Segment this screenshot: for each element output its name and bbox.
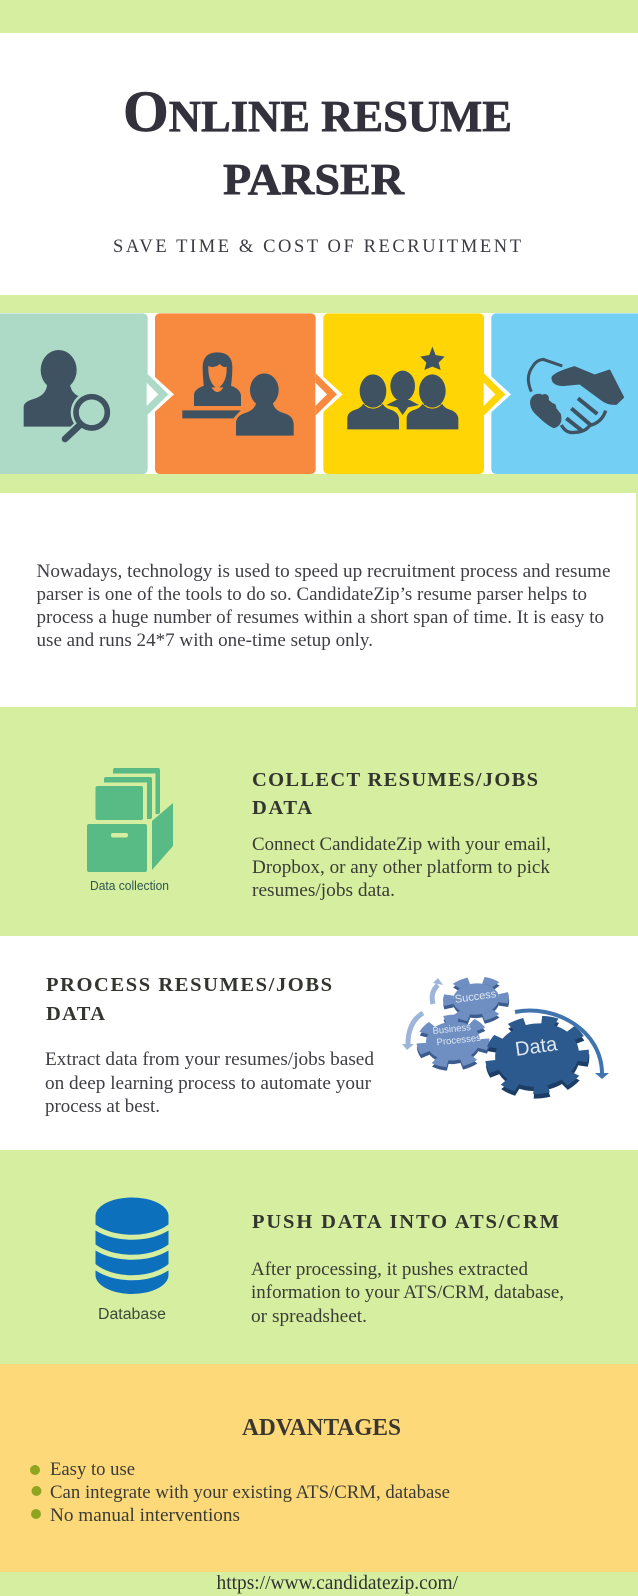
body text: Extract data from your resumes/jobs based (45, 1050, 375, 1070)
icon: interview people (182, 352, 294, 436)
intro text: Nowadays, technology is used to speed up recruitment process and resume (36, 562, 610, 582)
icon: data collection box (87, 768, 173, 872)
icon label: Data collection (90, 879, 169, 893)
bullet list: Can integrate with your existing ATS/CRM, database (50, 1483, 450, 1503)
gear arrows (402, 978, 609, 1079)
subtitle: SAVE TIME & COST OF RECRUITMENT (113, 237, 521, 257)
gear labels: Success (454, 988, 497, 1006)
title line 2: PARSER (223, 155, 405, 204)
heading: COLLECT RESUMES/JOBS (252, 769, 538, 791)
gear labels (432, 988, 559, 1061)
arrow: orange to yellow (315, 370, 343, 418)
bullet list (30, 1460, 450, 1526)
bullet list: No manual interventions (50, 1506, 240, 1526)
gear labels: Data (514, 1033, 559, 1061)
intro text: process a huge number of resumes within a short span of time. It is easy to (36, 608, 604, 628)
icon label: Database (98, 1306, 166, 1323)
body text: information to your ATS/CRM, database, (251, 1283, 564, 1303)
heading: PUSH DATA INTO ATS/CRM (252, 1211, 559, 1233)
heading: ADVANTAGES (242, 1415, 401, 1441)
panel: orange step (155, 313, 316, 474)
heading: PROCESS RESUMES/JOBS (46, 974, 332, 996)
arrow: yellow to blue (484, 370, 511, 418)
arrow: mint to orange (147, 370, 174, 418)
body text: Dropbox, or any other platform to pick (252, 858, 551, 878)
step panels in 3x coordinates (0, 313, 638, 474)
body text: Connect CandidateZip with your email, (252, 835, 551, 855)
panel: header (0, 33, 638, 295)
body text: After processing, it pushes extracted (251, 1260, 529, 1280)
icon: person with magnifier (24, 350, 113, 439)
bullet list: Easy to use (50, 1460, 135, 1480)
icon: gears diagram (402, 978, 609, 1099)
icon: handshake (528, 359, 624, 433)
intro text (36, 562, 610, 651)
panel: process (0, 936, 638, 1150)
intro text: parser is one of the tools to do so. CandidateZip’s resume parser helps to (36, 585, 587, 605)
title line 1: ONLINE RESUME (123, 79, 512, 144)
panel: push (0, 1150, 638, 1364)
panel: collect (0, 707, 638, 936)
panel: process icon strip (0, 295, 638, 494)
gear labels: Processes (436, 1033, 482, 1048)
footer url: https://www.candidatezip.com/ (216, 1573, 459, 1594)
body text: on deep learning process to automate your (45, 1074, 371, 1094)
body text: or spreadsheet. (251, 1307, 367, 1327)
intro text: use and runs 24*7 with one-time setup only. (36, 631, 373, 651)
body text (252, 835, 551, 901)
panel: yellow step (323, 313, 484, 474)
panel: blue step (491, 313, 638, 474)
body text: process at best. (45, 1097, 160, 1117)
panel: intro (0, 493, 638, 707)
body text (251, 1260, 564, 1327)
gear labels: Business (432, 1022, 472, 1037)
footer band (0, 1572, 638, 1596)
gear: success (447, 978, 505, 1023)
icon: team with star (347, 347, 458, 429)
panel: mint step (0, 313, 148, 474)
body text: resumes/jobs data. (252, 881, 395, 901)
top green band (0, 0, 638, 33)
body text (45, 1050, 375, 1117)
gear: data (488, 1016, 587, 1099)
panel: advantages (0, 1364, 638, 1572)
heading: DATA (46, 1003, 105, 1025)
heading (46, 974, 332, 1025)
gear: business processes (421, 1017, 486, 1069)
heading: DATA (252, 797, 312, 819)
heading (252, 769, 538, 819)
icon: database (86, 1198, 178, 1294)
